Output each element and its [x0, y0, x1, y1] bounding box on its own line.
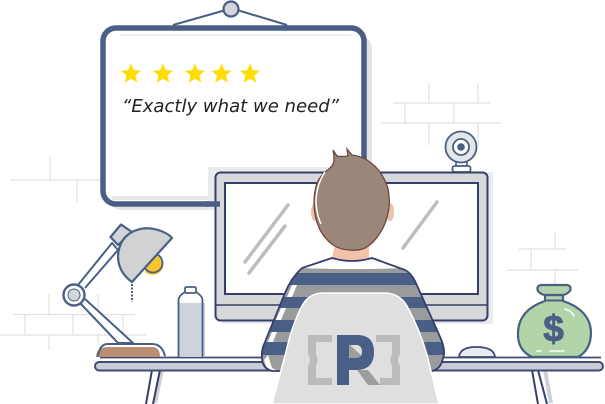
star rating [121, 64, 260, 82]
board bottom edge over monitor [205, 201, 220, 207]
screen reflections [245, 202, 437, 273]
brick wall patterns [0, 83, 578, 350]
review board [103, 2, 372, 210]
board pin [224, 2, 238, 16]
mouse [459, 347, 495, 357]
lamp bracket [110, 224, 132, 245]
bulb [145, 253, 163, 275]
lamp arms [78, 243, 118, 288]
sleeve highlights [264, 285, 297, 372]
water bottle [178, 287, 205, 357]
pull chain [131, 284, 133, 302]
logo [308, 335, 400, 385]
dollar sign: $ [543, 308, 564, 349]
office chair [272, 293, 439, 404]
quote text: “Exactly what we need” [122, 97, 340, 117]
money bag [518, 285, 591, 357]
hair [314, 149, 389, 250]
lamp shade [118, 228, 172, 282]
neck [332, 240, 369, 262]
ears [311, 203, 319, 221]
desk lamp [64, 224, 172, 357]
person [255, 149, 450, 372]
monitor [208, 167, 493, 324]
lamp base [96, 347, 160, 357]
desk [95, 358, 603, 404]
webcam [446, 132, 476, 172]
